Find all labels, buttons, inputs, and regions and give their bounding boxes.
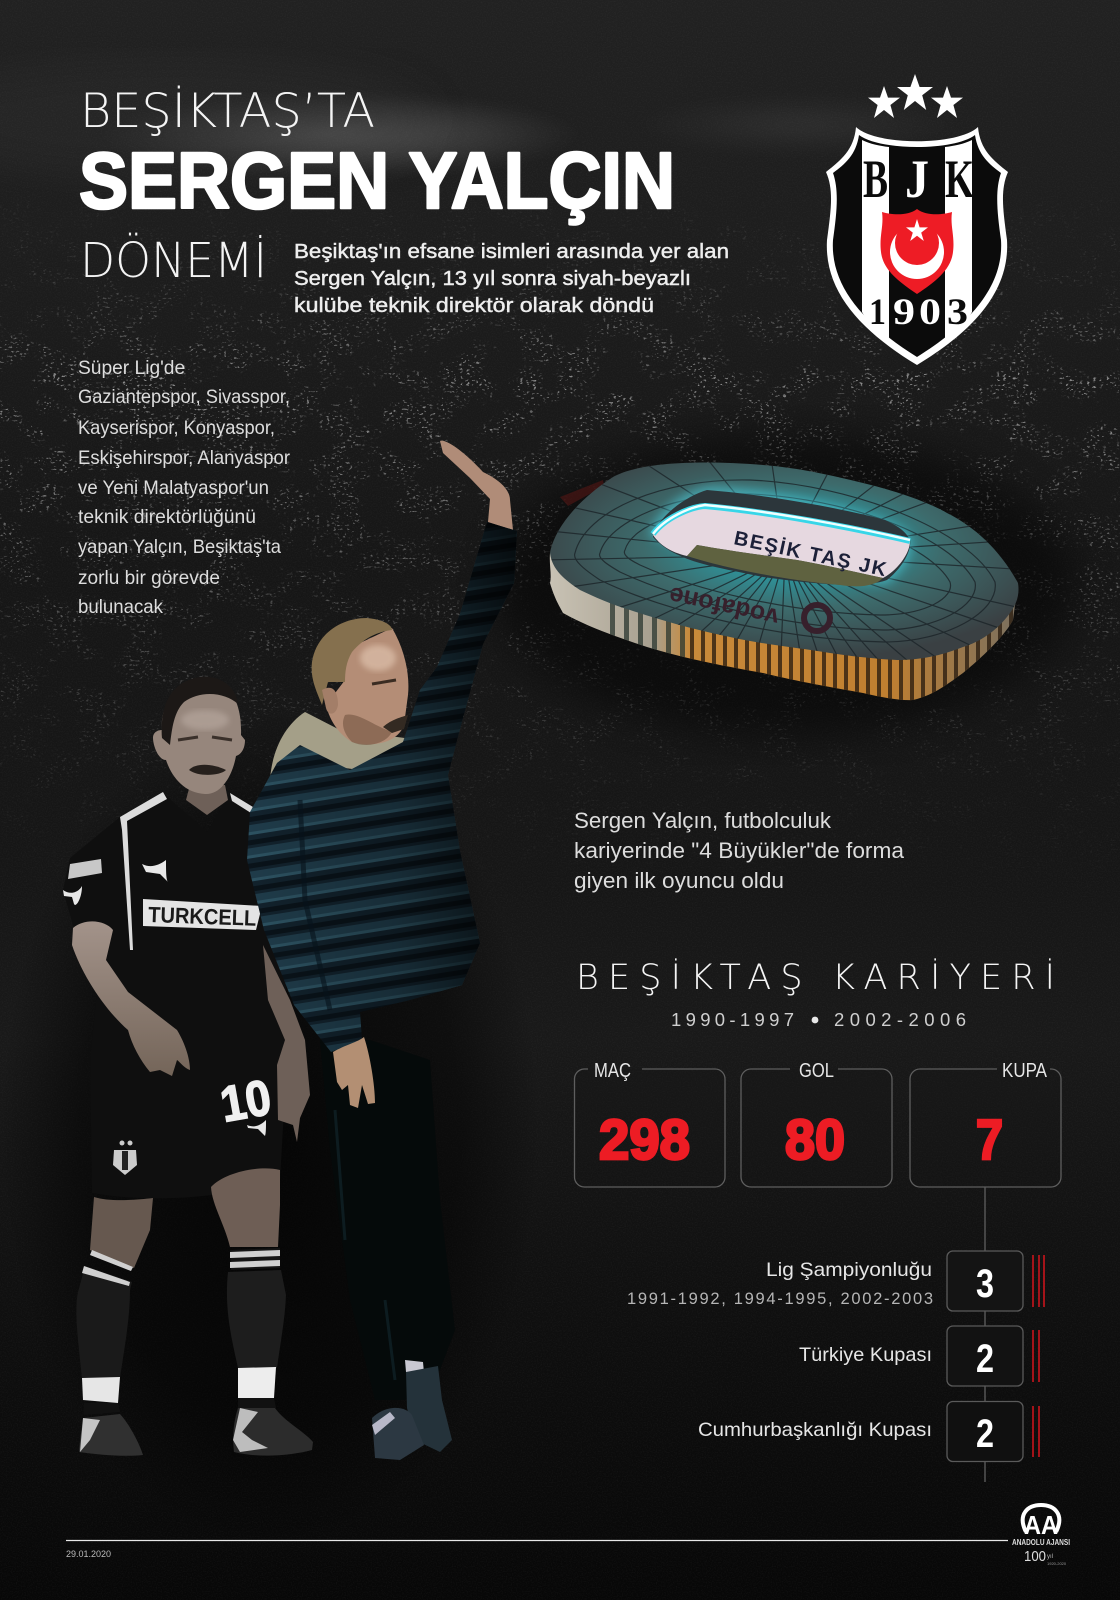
icon: three stars xyxy=(868,74,963,118)
middle text block: Sergen Yalçın, futbolculuk xyxy=(574,808,832,833)
title line: SERGEN YALÇIN: SERGEN YALÇIN xyxy=(79,136,675,225)
stat box: KUPA: 7 xyxy=(976,1108,1003,1172)
left text block: yapan Yalçın, Beşiktaş'ta xyxy=(78,537,281,558)
stat box: GOL: 80 xyxy=(785,1108,845,1172)
logo: Anadolu Ajansı xyxy=(1012,1505,1070,1566)
title line: DÖNEMİ: DÖNEMİ xyxy=(80,233,267,289)
left leg xyxy=(76,1197,153,1456)
logo: Anadolu Ajansı: 1920-2020 xyxy=(1047,1561,1067,1566)
left text block: ve Yeni Malatyaspor'un xyxy=(78,478,269,499)
trophy row: Cumhurbaşkanlığı Kupası: 2 xyxy=(976,1412,994,1456)
stat box: GOL xyxy=(741,1060,892,1187)
crest letters BJK: B xyxy=(863,149,888,209)
shoes xyxy=(372,1360,452,1460)
right arm xyxy=(263,945,310,1142)
logo: Anadolu Ajansı: 100 xyxy=(1024,1548,1046,1565)
left text block: teknik direktörlüğünü xyxy=(78,507,256,528)
stat box: MAÇ: 298 xyxy=(599,1108,690,1172)
shield xyxy=(826,127,1008,365)
ear xyxy=(322,688,338,714)
career section xyxy=(574,957,1061,1482)
stadium logo on roof: vodafone xyxy=(667,581,781,632)
title xyxy=(79,84,675,289)
trophy row: Lig Şampiyonluğu: 1991-1992, 1994-1995, 2002-2003 xyxy=(627,1290,933,1308)
intro text: kulübe teknik direktör olarak döndü xyxy=(294,294,654,317)
year 1903: 0 xyxy=(919,292,941,333)
stat box: KUPA: KUPA xyxy=(1002,1060,1048,1082)
crest letters BJK: J xyxy=(905,149,929,209)
trophy row: Cumhurbaşkanlığı Kupası xyxy=(698,1402,1039,1462)
career years: 1990-1997 xyxy=(671,1009,794,1030)
stadium wall xyxy=(550,553,1020,700)
dot separator xyxy=(812,1017,818,1023)
crest letters BJK: K xyxy=(945,149,974,209)
left arm xyxy=(72,921,190,1076)
shorts crest xyxy=(113,1140,137,1175)
year 1903 xyxy=(869,292,968,333)
jersey logos xyxy=(68,859,102,879)
coach head xyxy=(312,618,408,745)
trophy row: Lig Şampiyonluğu: Lig Şampiyonluğu xyxy=(766,1259,932,1281)
player in black Beşiktaş kit xyxy=(63,677,313,1456)
hoodie xyxy=(270,712,420,780)
stat box: MAÇ: MAÇ xyxy=(594,1060,631,1082)
year 1903: 1 xyxy=(869,292,886,333)
footer xyxy=(66,1505,1070,1566)
stat box: GOL: GOL xyxy=(799,1060,834,1082)
left text block: zorlu bir görevde xyxy=(78,568,220,589)
white stand xyxy=(653,507,910,578)
trophy row: Lig Şampiyonluğu: 3 xyxy=(976,1262,994,1306)
stand lettering: BEŞİK TAŞ JK xyxy=(732,526,889,581)
jacket xyxy=(247,522,517,1052)
intro text: Beşiktaş'ın efsane isimleri arasında yer alan xyxy=(294,240,729,263)
number 10 with brand mark: 10 xyxy=(216,1069,275,1133)
stadium opening and glow xyxy=(648,486,912,584)
cyan light strip xyxy=(653,506,910,541)
title line: BEŞİKTAŞ'TA: BEŞİKTAŞ’TA xyxy=(80,84,375,139)
stadium xyxy=(495,435,1075,735)
jersey white trim xyxy=(120,792,167,950)
left text block: Kayserispor, Konyaspor, xyxy=(78,418,275,439)
coach in blue puffer jacket xyxy=(247,441,517,1460)
stat box: MAÇ xyxy=(574,1060,725,1187)
section heading: BEŞİKTAŞ KARİYERİ xyxy=(576,957,1055,998)
stat box: KUPA xyxy=(910,1060,1061,1187)
logo: Anadolu Ajansı: ANADOLU AJANSI xyxy=(1012,1538,1070,1547)
trousers xyxy=(320,1040,455,1400)
intro text xyxy=(294,240,729,317)
intro text: Sergen Yalçın, 13 yıl sonra siyah-beyazlı xyxy=(294,267,691,290)
red shield with crescent and star xyxy=(881,209,953,294)
head xyxy=(153,677,245,815)
trophy row: Cumhurbaşkanlığı Kupası: Cumhurbaşkanlığı Kupası xyxy=(698,1419,932,1441)
trophy row: Türkiye Kupası: Türkiye Kupası xyxy=(799,1344,932,1366)
left text block: Eskişehirspor, Alanyaspor xyxy=(78,448,291,469)
date: 29.01.2020 xyxy=(66,1549,111,1559)
left text block xyxy=(78,358,291,618)
crest letters BJK xyxy=(863,149,974,209)
lowered hand xyxy=(333,1037,375,1108)
logo: Anadolu Ajansı: yıl xyxy=(1047,1554,1053,1560)
middle text block: giyen ilk oyuncu oldu xyxy=(574,868,784,893)
Turkcell sponsor: TURKCELL xyxy=(148,902,257,931)
career years second: 2002-2006 xyxy=(834,1009,966,1030)
moustache xyxy=(383,715,408,733)
year 1903: 3 xyxy=(947,292,968,333)
logo: Beşiktaş JK crest xyxy=(826,74,1008,365)
trophy row: Lig Şampiyonluğu xyxy=(627,1251,1044,1311)
left text block: Gaziantepspor, Sivasspor, xyxy=(78,387,290,408)
middle text block xyxy=(574,808,905,893)
year 1903: 9 xyxy=(893,292,915,333)
raised hand xyxy=(440,441,513,530)
hair xyxy=(312,618,392,705)
jersey xyxy=(63,793,288,1198)
left text block: bulunacak xyxy=(78,597,163,618)
logo: Anadolu Ajansı: AA xyxy=(1024,1510,1058,1540)
trophy row: Türkiye Kupası: 2 xyxy=(976,1337,994,1381)
right leg xyxy=(211,1168,313,1456)
stadium roof xyxy=(550,463,1019,660)
left text block: Süper Lig'de xyxy=(78,358,185,379)
middle text block: kariyerinde "4 Büyükler"de forma xyxy=(574,838,905,863)
trophy row: Türkiye Kupası xyxy=(799,1326,1039,1386)
pitch xyxy=(687,545,883,586)
connector line xyxy=(984,1187,986,1482)
